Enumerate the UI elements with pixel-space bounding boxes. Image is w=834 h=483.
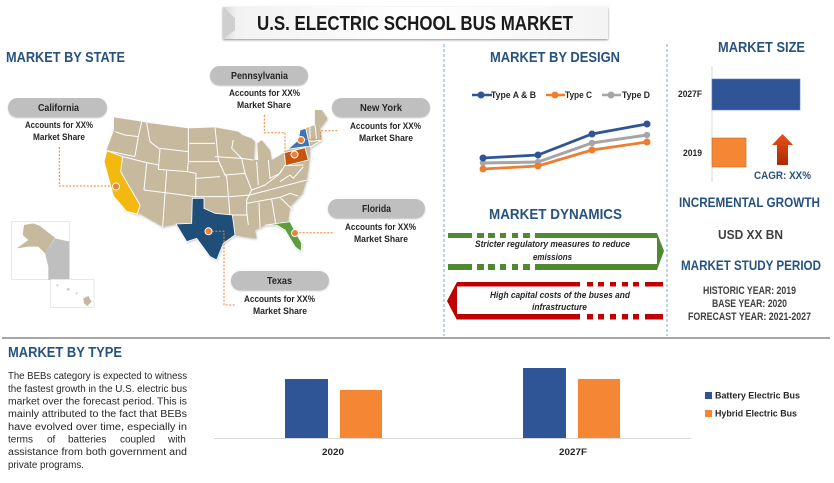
label: New York: Market Share — [359, 133, 413, 144]
US map — [12, 110, 328, 307]
label: Pennsylvania: Accounts for XX% — [229, 88, 300, 99]
arrow: driver: Stricter regulatory measures to reduce — [475, 239, 631, 250]
label: Florida: Market Share — [354, 234, 408, 245]
text block: market by type: private programs. — [8, 460, 84, 471]
label: Florida: Florida — [362, 203, 391, 215]
arrow: driver — [448, 233, 664, 270]
text block: market by type: assistance from both government and — [8, 447, 187, 458]
bar chart: market by type — [214, 368, 691, 458]
state: Florida — [265, 222, 302, 252]
heading: market dynamics: MARKET DYNAMICS — [489, 206, 622, 223]
label: Florida: Accounts for XX% — [345, 222, 416, 233]
connector lines and state markers — [59, 115, 337, 305]
label: New York: New York — [360, 102, 402, 114]
text block: market by type: The BEBs category is expected to witness — [8, 371, 187, 382]
title banner — [223, 7, 608, 39]
text block: market by type: the fastest growth in the U.S. electric bus — [8, 384, 187, 395]
state: California — [104, 151, 140, 214]
bar chart: market size: 2019 — [683, 148, 702, 159]
heading: market by design: MARKET BY DESIGN — [490, 49, 620, 66]
chart legend: market by type — [705, 390, 800, 420]
label: California — [8, 98, 107, 143]
state: Texas — [176, 198, 235, 260]
chart legend: Type C — [565, 90, 592, 101]
CAGR label: CAGR: XX% — [754, 170, 811, 182]
title banner: U.S. ELECTRIC SCHOOL BUS MARKET — [257, 13, 573, 35]
label: California: California — [38, 102, 79, 114]
label: Pennsylvania: Market Share — [237, 100, 291, 111]
text block: market by type: market over the forecast period. This is — [8, 396, 187, 408]
chart legend: market by type: Hybrid Electric Bus — [715, 408, 797, 420]
line chart: market by design — [472, 90, 650, 172]
arrow: growth — [772, 134, 793, 165]
bar chart: market size — [678, 66, 800, 182]
label: New York: Accounts for XX% — [350, 121, 421, 132]
text block: market by type — [8, 371, 187, 471]
heading: market by type: MARKET BY TYPE — [8, 344, 122, 361]
label: Florida — [328, 199, 425, 245]
label: Pennsylvania — [210, 66, 308, 111]
text block: market by type: of — [47, 434, 56, 446]
label: Pennsylvania: Pennsylvania — [231, 70, 288, 82]
arrow: driver: emissions — [533, 252, 572, 263]
text block: market by type: have evolved over time, especially in — [8, 422, 187, 433]
label: California: Accounts for XX% — [25, 120, 93, 131]
chart legend: market by type: Battery Electric Bus — [715, 390, 800, 402]
bar chart: market by type: 2020 — [322, 447, 344, 458]
arrow: restraint: infrastructure — [532, 302, 588, 313]
arrow: restraint: High capital costs of the buses and — [490, 290, 630, 301]
label: New York — [332, 98, 430, 144]
map inset: Hawaii — [51, 279, 94, 307]
bar chart: market by type: 2027F — [559, 447, 587, 458]
chart legend: Type D — [622, 90, 650, 101]
map: contiguous states — [104, 110, 328, 260]
study period years — [688, 285, 811, 323]
chart legend — [472, 90, 650, 101]
text block: market by type: mainly attributed to the fact that BEBs — [8, 409, 187, 420]
label: Texas — [231, 271, 329, 317]
map inset: Alaska — [12, 222, 69, 280]
study period years: HISTORIC YEAR: 2019 — [703, 285, 796, 297]
text block: market by type: with — [167, 434, 186, 446]
chart legend: Type A & B — [491, 90, 536, 101]
text block: market by type: batteries — [68, 434, 106, 446]
text block: market by type: coupled — [120, 434, 155, 446]
arrow: restraint — [447, 282, 663, 320]
state: New York — [288, 128, 310, 149]
label: Texas: Market Share — [253, 306, 307, 317]
bar chart: market size: 2027F — [678, 89, 702, 100]
text block: market by type: terms — [8, 434, 33, 446]
heading: market by state: MARKET BY STATE — [6, 49, 125, 66]
state: Pennsylvania — [284, 148, 308, 166]
study period years: BASE YEAR: 2020 — [712, 298, 787, 310]
heading: market size: MARKET SIZE — [718, 39, 805, 56]
value: incremental growth: USD XX BN — [718, 227, 783, 242]
label: Texas: Texas — [267, 275, 292, 287]
label: Texas: Accounts for XX% — [244, 294, 315, 305]
label: California: Market Share — [33, 132, 85, 143]
